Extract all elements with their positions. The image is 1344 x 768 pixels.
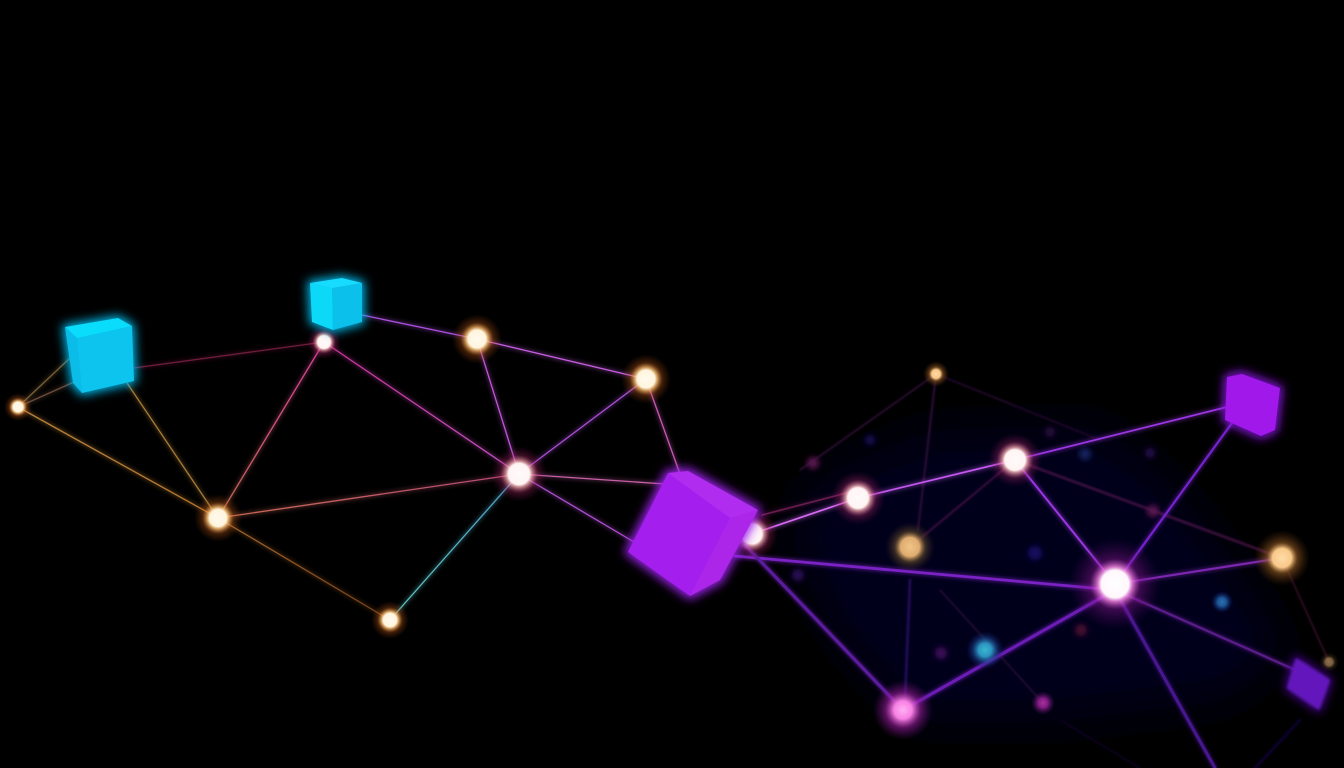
node: magenta dim xyxy=(1031,691,1055,715)
node: warm right xyxy=(621,354,671,404)
node: upper hub xyxy=(988,433,1042,487)
node: bottom xyxy=(371,601,409,639)
node: pink bottom xyxy=(873,680,933,740)
node: top small xyxy=(923,361,949,387)
right network edges xyxy=(735,407,1300,768)
node: mid right xyxy=(831,471,885,525)
dim background nodes xyxy=(792,427,1159,659)
purple cube top right xyxy=(1225,374,1280,436)
node: tan center xyxy=(885,522,935,572)
node: orange lower xyxy=(194,494,242,542)
node: cyan dim xyxy=(966,631,1004,669)
cyan cube top xyxy=(310,278,362,330)
left network edges xyxy=(18,315,680,620)
node: tan dim far right xyxy=(1319,652,1339,672)
node: pink white xyxy=(307,325,341,359)
node: main hub xyxy=(1069,538,1161,630)
node: blue dim xyxy=(1211,591,1233,613)
node: tan right xyxy=(1254,530,1310,586)
purple cube bottom right xyxy=(1287,658,1330,710)
dark blue haze xyxy=(790,425,1290,722)
cyan cube left xyxy=(65,318,134,393)
big purple cube xyxy=(628,471,758,596)
node: central left xyxy=(491,446,547,502)
node: far left xyxy=(4,393,32,421)
dim background edges xyxy=(800,374,1329,768)
node: warm top xyxy=(452,314,502,364)
node: behind big cube xyxy=(726,508,778,560)
